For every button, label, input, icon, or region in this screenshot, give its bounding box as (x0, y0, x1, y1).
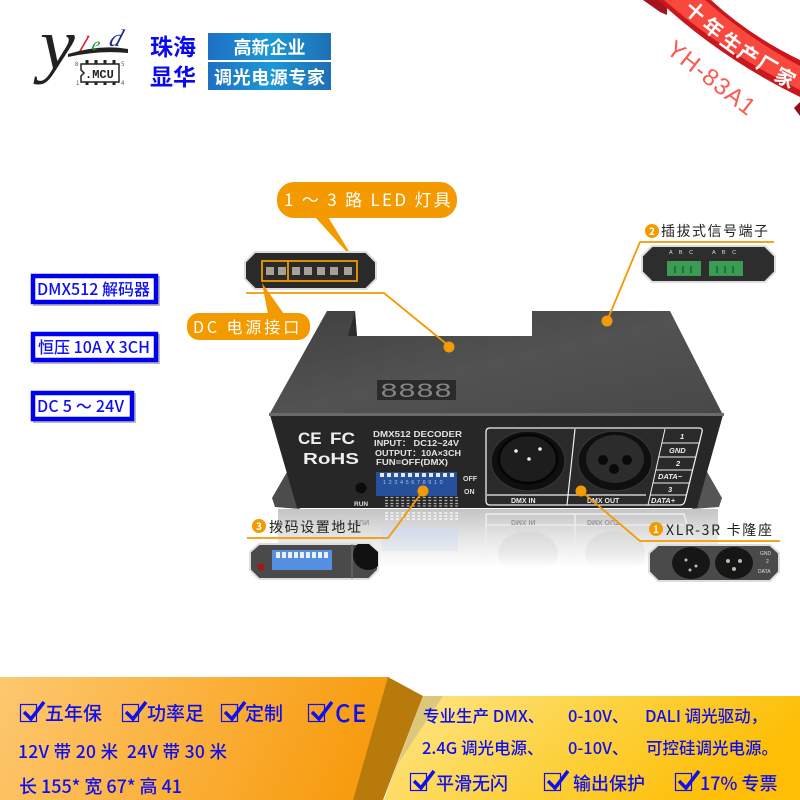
reflection of device: DMX OUT (587, 518, 620, 525)
DMX OUT connector (578, 431, 652, 505)
ribbon: 十年生产厂家: 生 (715, 24, 748, 59)
spec text: DMX512 DECODER (373, 430, 462, 439)
thumbnail: power terminal block (245, 252, 376, 289)
reflection of device (278, 509, 718, 562)
product line 2: 2.4G 调光电源、 (422, 735, 544, 759)
check: customizable: 定制 (245, 699, 283, 726)
logo: ytled MCU: y (33, 4, 75, 85)
logo: ytled MCU: .MCU (85, 68, 114, 82)
label 3: DIP address setting: 3 (256, 518, 262, 533)
terminal labels: 1 (680, 432, 684, 441)
certification marks: CE (298, 429, 322, 448)
label 1: XLR-3R socket: XLR-3R 卡隆座 (666, 520, 774, 540)
banner: 高新企业 调光电源专家 (208, 33, 331, 90)
callout: DC power port (187, 283, 310, 340)
terminal labels (648, 429, 700, 505)
footer fold (353, 677, 443, 800)
terminal labels: 3 (668, 485, 673, 494)
tag: voltage range (33, 393, 136, 423)
LED display: 8888 (380, 381, 452, 403)
logo: ytled MCU: 5 (121, 59, 124, 68)
product line 1: 0-10V、 (568, 703, 628, 727)
check: CE (308, 694, 368, 729)
callout: 1-3 channel LED: 1 ～ 3 路 LED 灯具 (284, 186, 453, 211)
product line 2: 可控硅调光电源。 (646, 735, 778, 759)
spec text (373, 430, 462, 467)
product line 1: DALI 调光驱动， (645, 703, 767, 727)
logo: ytled MCU: 8 (75, 59, 79, 68)
tag: constant voltage: 恒压 10A X 3CH (38, 334, 150, 358)
callout: 1-3 channel LED (277, 182, 457, 261)
banner: 高新企业 调光电源专家: 高新企业 (234, 34, 306, 60)
terminal labels: GND (669, 446, 686, 455)
thumbnail: DIP switch (250, 540, 383, 579)
footer panel: left (0, 677, 389, 800)
front panel (270, 415, 723, 508)
label 2: pluggable signal terminal: 2 (649, 223, 655, 238)
reflection of device: RUN (354, 518, 369, 525)
footer panel: right (384, 696, 800, 800)
spec text: FUN=OFF(DMX) (376, 458, 448, 467)
thumbnail: XLR sockets: GND (760, 551, 772, 557)
logo: ytled MCU (33, 4, 128, 87)
ribbon: 十年生产厂家: 产 (733, 36, 765, 71)
terminal labels: DATA+ (651, 496, 676, 505)
reflection of device: DMX IN (511, 518, 536, 525)
connector panel (486, 428, 702, 505)
spec text: OUTPUT：10A×3CH (375, 449, 461, 458)
thumbnail: XLR sockets: DATA (758, 569, 771, 575)
check: no flicker: 平滑无闪 (436, 770, 508, 796)
check: output protection: 输出保护 (573, 770, 645, 796)
label 1: XLR-3R socket: 1 (653, 521, 659, 536)
DIP switch: OFF (463, 476, 478, 483)
logo: ytled MCU: d (106, 26, 127, 52)
check: sufficient power: 功率足 (147, 699, 204, 726)
label 3: DIP address setting: 拨码设置地址 (269, 517, 363, 537)
product line 1: 专业生产 DMX、 (423, 703, 544, 727)
top cover (269, 311, 723, 415)
dimensions: 长 155* 宽 67* 高 41 (19, 773, 182, 799)
certification marks (298, 429, 359, 468)
footer left: feature checks and specs (18, 694, 368, 799)
ribbon: 十年生产厂家: 厂 (752, 47, 784, 82)
tag: voltage range: DC 5 ～ 24V (37, 393, 124, 417)
terminal labels: DATA− (658, 472, 683, 481)
check: CE: CE (335, 694, 368, 729)
callout: DC power port: DC 电源接口 (193, 314, 302, 338)
check: customizable (222, 699, 283, 726)
model number: YH-83A1 (661, 35, 761, 122)
company name: 显华 (150, 58, 196, 92)
panel: feature tags (33, 276, 160, 423)
device: DMX512 decoder (269, 311, 724, 509)
check: sufficient power (122, 699, 204, 726)
check: 17% invoice: 17% 专票 (700, 770, 777, 796)
product line 1 (423, 703, 767, 727)
company name (150, 28, 196, 92)
terminal labels: 2 (675, 459, 681, 468)
thumbnail: signal terminal: A B C (669, 250, 696, 256)
product line 2 (422, 735, 778, 759)
logo: ytled MCU: 1 (76, 78, 79, 87)
thumbnail: signal terminal: A B C (712, 250, 739, 256)
mounting flanges (272, 472, 300, 509)
certification marks: RoHS (303, 451, 359, 468)
footer right: product lines and checks (410, 703, 778, 796)
leader line: DIP switch (247, 486, 428, 538)
label 2: pluggable signal terminal: 插拔式信号端子 (661, 221, 770, 241)
logo: ytled MCU: l (76, 32, 92, 56)
product line 2: 0-10V、 (568, 735, 628, 759)
ribbon: 十年生产厂家 (643, 0, 800, 116)
DIP switch: 12345678910 (383, 480, 445, 486)
company name: 珠海 (150, 28, 196, 62)
logo: ytled MCU: 4 (121, 78, 125, 87)
ribbon: 十年生产厂家: 年 (697, 9, 731, 44)
DMX IN connector (491, 431, 565, 505)
DMX IN connector: DMX IN (511, 498, 536, 505)
certification marks: FC (330, 429, 355, 448)
logo: ytled MCU: e (90, 34, 102, 54)
DIP switch (376, 472, 478, 496)
thumbnail: signal terminal (642, 246, 775, 282)
thumbnail: XLR sockets (649, 545, 779, 581)
tag: DMX512 decoder: DMX512 解码器 (37, 276, 150, 300)
check: five-year warranty (20, 699, 102, 726)
leader line: signal terminal (602, 242, 774, 326)
RUN indicator: RUN (354, 501, 368, 508)
check: five-year warranty: 五年保 (45, 699, 102, 726)
leader line: top cover (246, 293, 454, 352)
leader line: XLR connector (576, 486, 780, 541)
spec text: INPUT： DC12~24V (374, 439, 460, 448)
RUN indicator (354, 482, 458, 508)
DMX OUT connector: DMX OUT (587, 498, 620, 505)
banner: 高新企业 调光电源专家: 调光电源专家 (214, 64, 325, 90)
thumbnail: XLR sockets: 2 (766, 559, 769, 565)
DIP switch: ON (464, 489, 474, 496)
strip length: 12V 带 20 米 24V 带 30 米 (18, 739, 228, 764)
